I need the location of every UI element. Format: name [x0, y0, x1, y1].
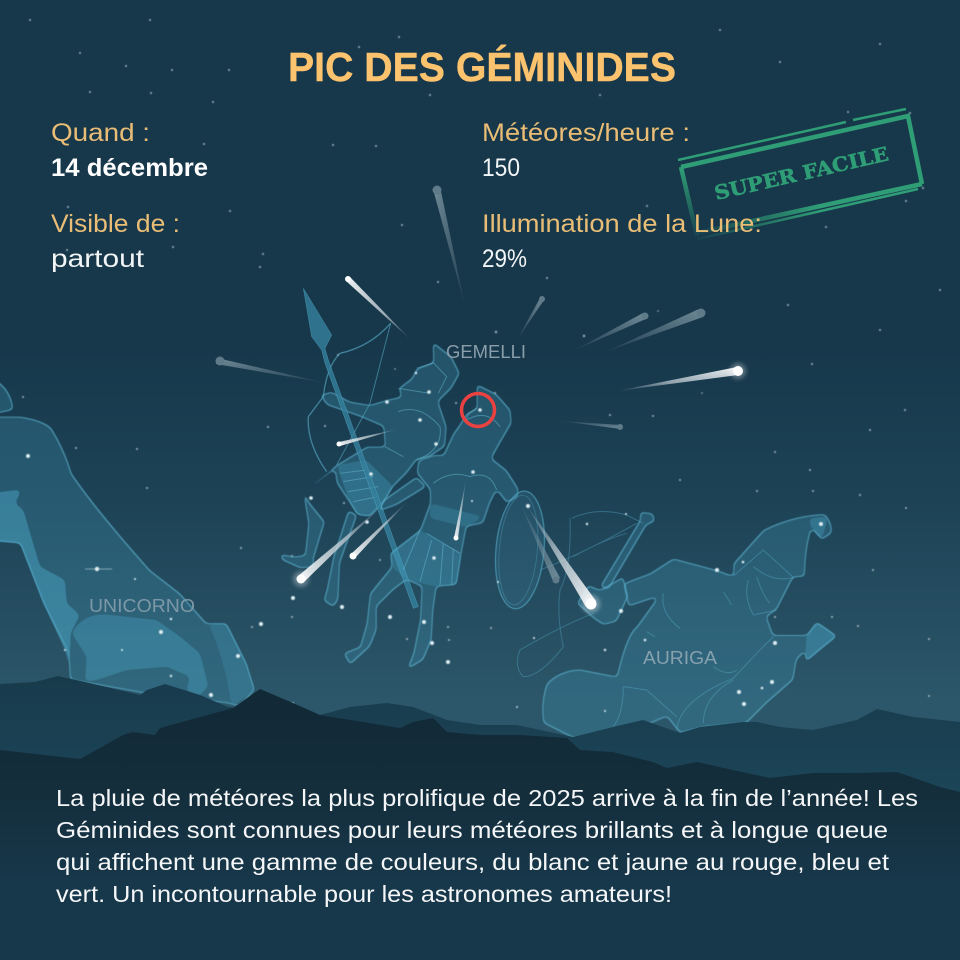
info block: date: Quand : [51, 119, 150, 147]
description paragraph: La pluie de météores la plus prolifique de 2025 arrive à la fin de l’année! Les [56, 785, 918, 811]
meteor 7 [617, 363, 746, 391]
meteor 13 [527, 506, 600, 613]
mountain ridge: front layer [0, 689, 960, 960]
left twin [280, 342, 460, 607]
constellation: Auriga [517, 512, 837, 738]
meteor 6 [605, 308, 706, 352]
meteor 11 [350, 502, 407, 560]
whip and rein lines [517, 512, 643, 677]
meteor 10 [293, 507, 381, 587]
right twin [343, 384, 518, 670]
title: PIC DES GÉMINIDES [288, 44, 676, 90]
info block: meteors per hour: Météores/heure : [482, 119, 690, 147]
constellation label: Auriga: AURIGA [643, 647, 718, 668]
spear [303, 288, 418, 608]
info block: moon illumination [482, 210, 762, 273]
stamp: Super facile [678, 109, 922, 239]
meteor 9 [336, 429, 398, 446]
info block: visibility [51, 210, 180, 273]
constellation label: Unicorno: UNICORNO [89, 595, 195, 616]
constellation label: Gemelli: GEMELLI [446, 341, 526, 362]
stamp: Super facile: SUPER FACILE [712, 142, 891, 205]
info block: meteors per hour: 150 [482, 154, 520, 182]
meteor 5 [575, 312, 648, 350]
shield [491, 489, 549, 611]
info block: date [51, 119, 208, 182]
constellation: Unicorno [0, 377, 255, 707]
meteor 14 [520, 503, 560, 584]
info block: moon illumination: Illumination de la Lune: [482, 210, 762, 238]
info block: visibility: partout [51, 245, 144, 273]
meteor 3 [216, 356, 326, 383]
mountain ridge: back layer [0, 676, 960, 960]
constellation: Gemelli twins [280, 288, 549, 670]
description paragraph: Géminides sont connues pour leurs météores brillants et à longue queue [56, 817, 888, 843]
star clusters on the constellations [26, 372, 823, 712]
radiant marker: red circle [462, 394, 494, 426]
description paragraph: qui affichent une gamme de couleurs, du blanc et jaune au rouge, bleu et [56, 849, 890, 875]
meteor 12 [454, 480, 466, 540]
meteor 1 [432, 186, 465, 306]
small background stars [22, 19, 941, 708]
info block: visibility: Visible de : [51, 210, 180, 238]
bow [308, 323, 391, 472]
description paragraph: vert. Un incontournable pour les astronomes amateurs! [56, 881, 672, 907]
meteor 8 [560, 421, 623, 430]
description paragraph [56, 785, 918, 907]
info block: meteors per hour [482, 119, 690, 182]
info block: date: 14 décembre [51, 154, 208, 182]
meteor 4 [517, 296, 545, 340]
info block: moon illumination: 29% [482, 245, 527, 273]
meteors radiating from Gemini [216, 186, 746, 613]
meteor 2 [345, 276, 411, 340]
